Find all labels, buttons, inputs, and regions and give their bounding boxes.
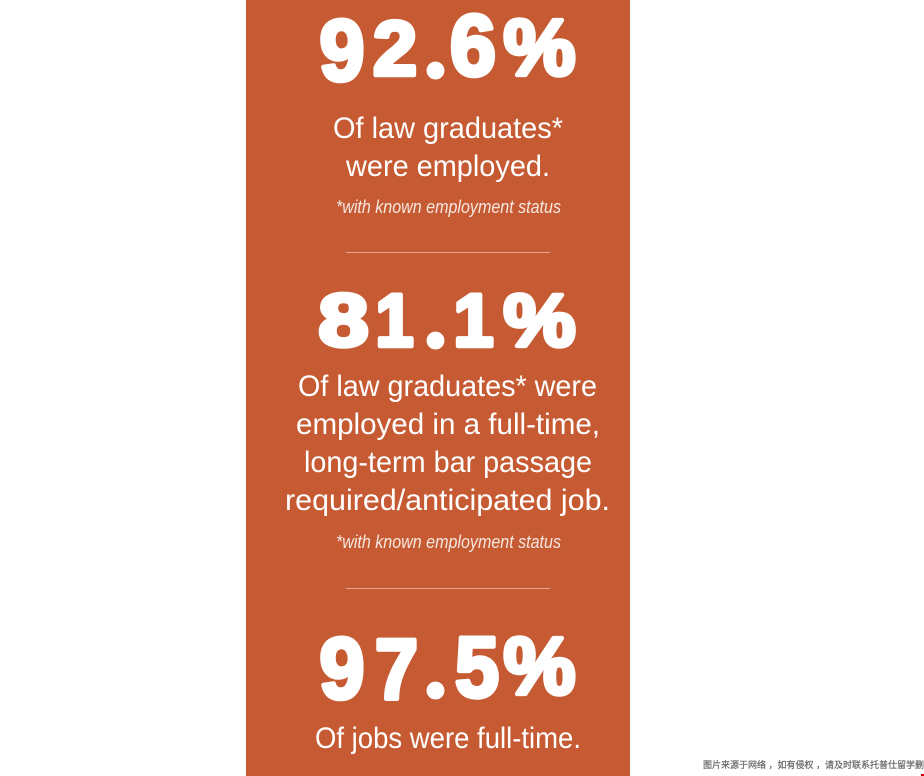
text block: employed description: Of law graduates* (333, 112, 563, 145)
statistic: 81.1 percent: % (504, 279, 576, 362)
statistic: 81.1 percent: . (422, 250, 449, 372)
text block: full-time bar passage description: employed in a full-time, (296, 408, 600, 441)
text block: employed description: were employed. (345, 150, 550, 183)
statistic: 97.5 percent: 7 (375, 622, 418, 718)
panel: orange statistics column (246, 0, 630, 776)
statistic: 81.1 percent: 1 (454, 279, 494, 362)
statistic: 92.6 percent (320, 0, 576, 102)
footnote: known employment status: *with known employment status (336, 197, 561, 217)
statistic: 97.5 percent: 5 (455, 620, 499, 716)
text block: full-time bar passage description: Of law graduates* were (298, 370, 597, 403)
statistic: 81.1 percent (318, 250, 576, 372)
text block: full-time jobs description: Of jobs were full-time. (315, 722, 581, 755)
statistic: 92.6 percent: 9 (320, 3, 364, 99)
statistic: 81.1 percent: 1 (376, 279, 414, 362)
text block: full-time bar passage description: required/anticipated job. (285, 484, 610, 517)
text block: full-time bar passage description: long-term bar passage (304, 446, 592, 479)
text block: full-time bar passage description (285, 370, 610, 517)
statistic: 81.1 percent: 8 (318, 279, 368, 362)
statistic: 97.5 percent: % (504, 622, 576, 712)
text block: employed description (333, 112, 563, 183)
statistic: 92.6 percent: 2 (373, 6, 417, 92)
footnote: known employment status: *with known employment status (336, 532, 561, 552)
statistic: 92.6 percent: 6 (450, 0, 496, 94)
statistic: 92.6 percent: % (504, 3, 576, 92)
statistic: 97.5 percent (320, 600, 576, 722)
statistic: 97.5 percent: 9 (320, 621, 364, 717)
statistic: 97.5 percent: . (422, 600, 449, 722)
